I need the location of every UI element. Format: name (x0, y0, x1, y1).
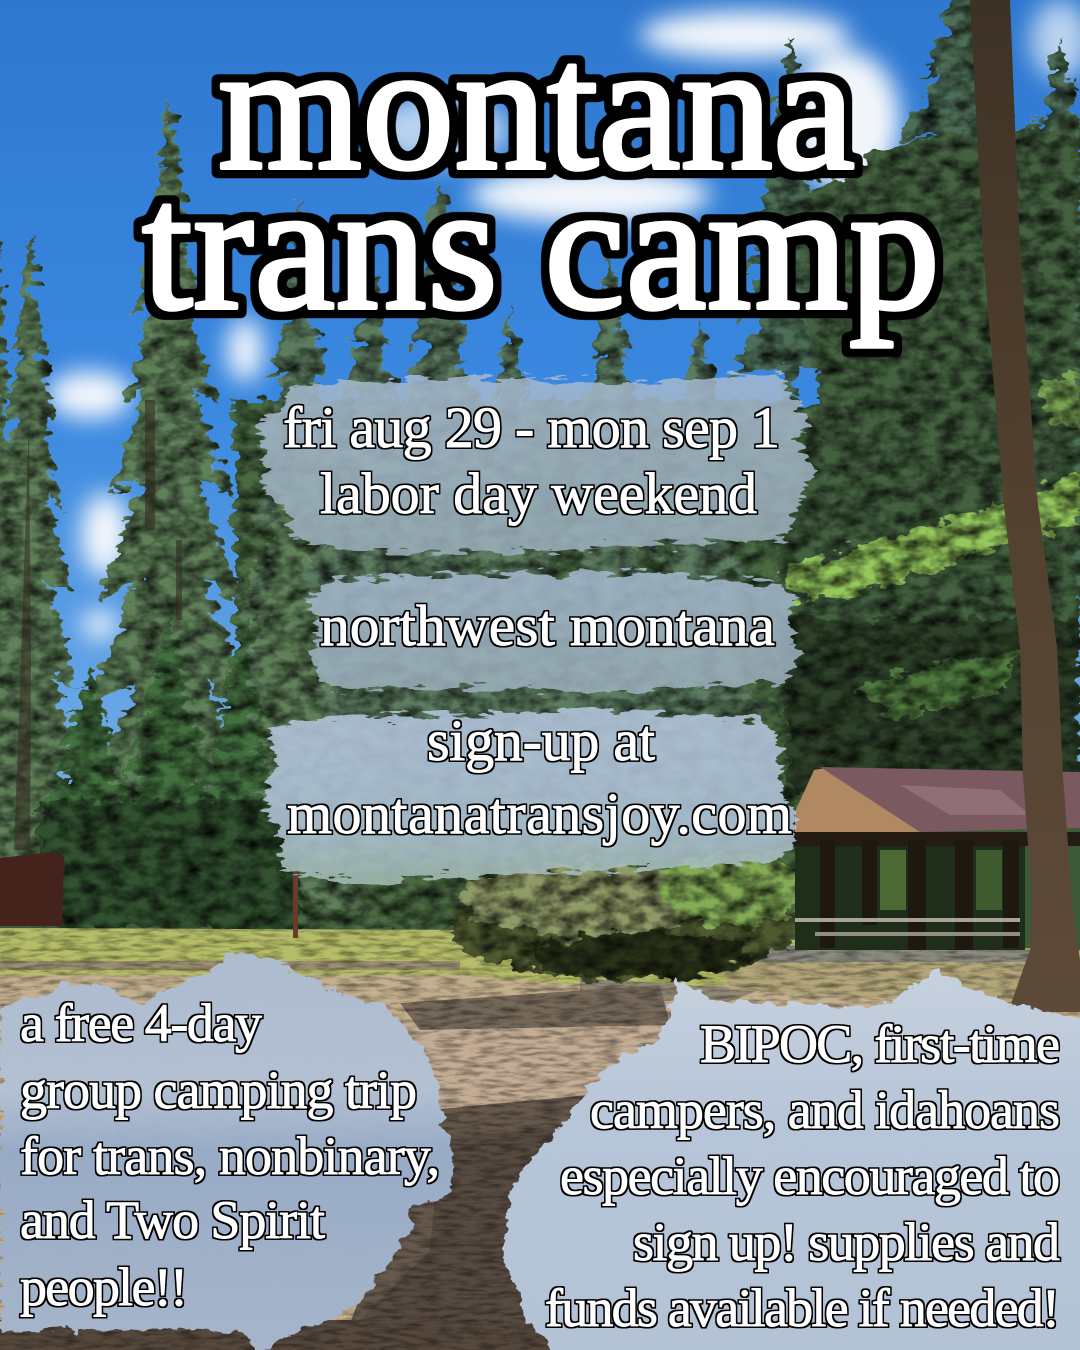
description text: group camping trip (20, 1060, 417, 1120)
encouragement text: sign up! supplies and (633, 1212, 1060, 1272)
title (142, 7, 940, 348)
big foreground trunk (970, 0, 1080, 1012)
brush panel: description left (0, 950, 455, 1350)
right big conifers (730, 0, 1080, 800)
grass (0, 928, 1080, 1010)
encouragement text: campers, and idahoans (590, 1080, 1060, 1140)
event dates: labor day weekend (320, 461, 757, 526)
description text: and Two Spirit (20, 1190, 325, 1250)
description text: a free 4-day (20, 993, 262, 1053)
far tree line (218, 180, 835, 930)
tall conifers (0, 100, 367, 940)
encouragement text: BIPOC, first-time (700, 1014, 1060, 1074)
beam (790, 832, 1080, 846)
path shadows (400, 985, 670, 1030)
sign post (293, 870, 298, 938)
sky (0, 0, 1080, 800)
location: northwest montana (320, 593, 775, 658)
tree trunks (14, 400, 182, 850)
dry grass and path (0, 965, 1080, 1350)
ground (0, 928, 1080, 1350)
brush panel: sign-up (262, 710, 798, 882)
roof (820, 767, 1080, 832)
event dates (283, 395, 780, 526)
encouragement text (545, 1014, 1060, 1338)
sign-up info (287, 708, 792, 846)
description text: for trans, nonbinary, (20, 1126, 440, 1186)
description text: people!! (20, 1257, 188, 1317)
brush panel: location (308, 572, 800, 692)
description text (20, 993, 440, 1317)
sunlit path (360, 1000, 680, 1350)
curb (0, 961, 460, 970)
encouragement text: especially encouraged to (560, 1146, 1060, 1206)
picnic pad (755, 945, 1030, 965)
title: trans camp (142, 147, 940, 348)
large bush (450, 854, 810, 980)
sign-up info: montanatransjoy.com (287, 781, 792, 846)
sign-up info: sign-up at (427, 708, 655, 773)
lower left young trees (13, 620, 312, 930)
gable (795, 768, 920, 838)
sunlit branches (780, 372, 1080, 720)
brush panel: dates (254, 374, 812, 553)
title: montana (218, 7, 855, 208)
clouds (48, 0, 1080, 639)
brush panel: encouragement right (505, 968, 1080, 1350)
lit foliage behind posts (880, 850, 906, 910)
encouragement text: funds available if needed! (545, 1278, 1060, 1338)
event dates: fri aug 29 - mon sep 1 (283, 395, 780, 460)
picnic shelter (790, 767, 1080, 950)
shed (0, 852, 64, 926)
